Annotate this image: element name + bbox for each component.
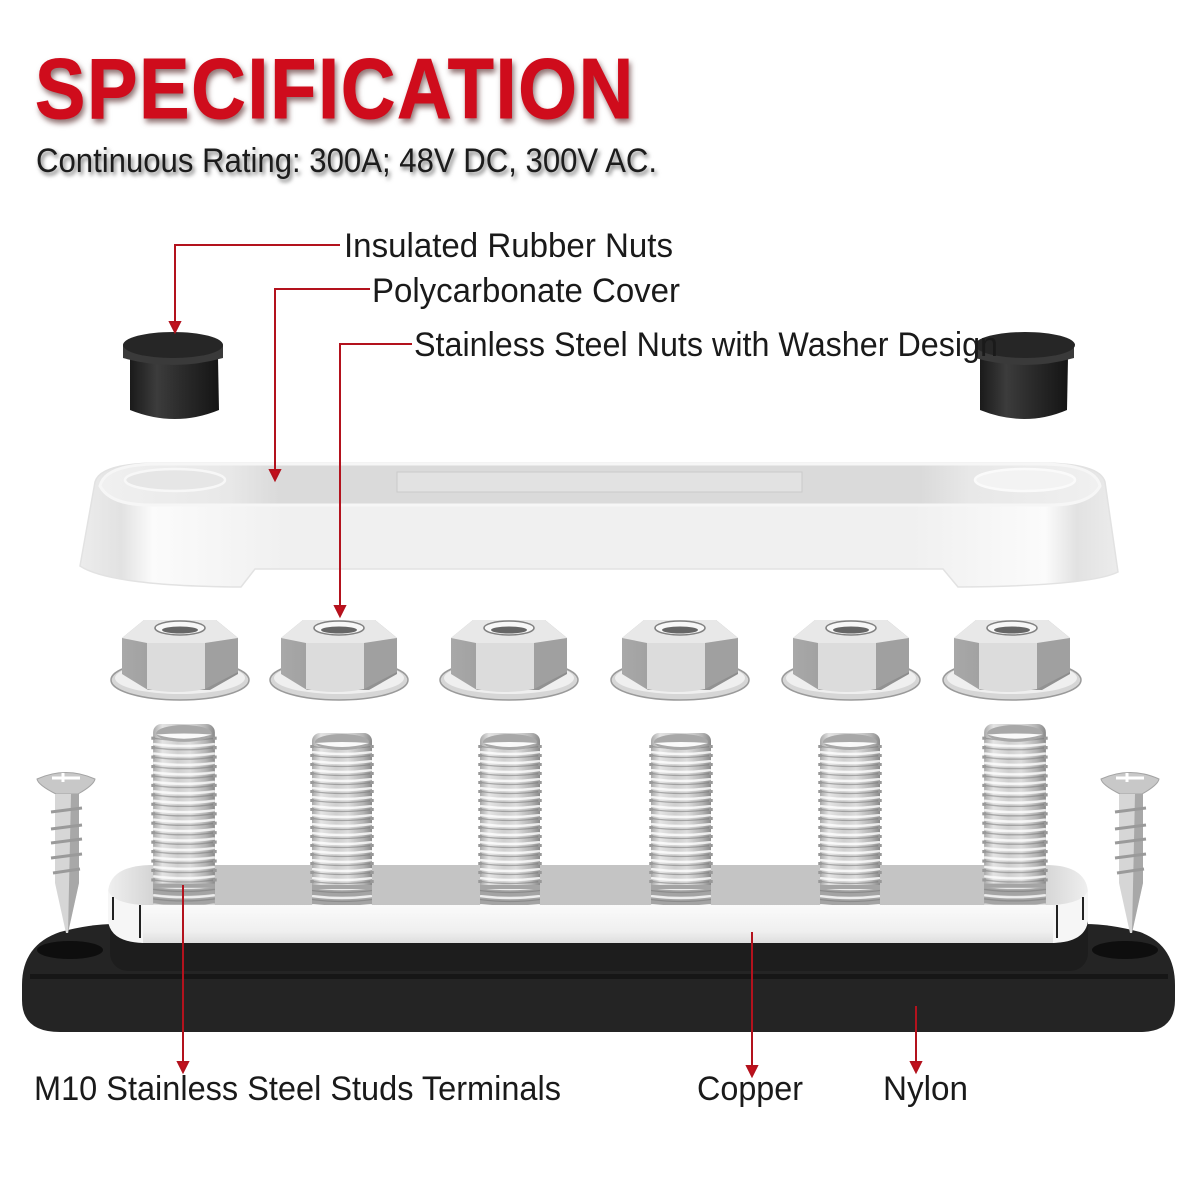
subtitle: continuous rating: Continuous Rating: 300A; 48V DC, 300V AC. <box>36 142 657 180</box>
icon: right insulated rubber nut <box>975 332 1075 419</box>
icon: left screw <box>37 772 95 933</box>
label: insulated rubber nuts: Insulated Rubber Nuts <box>344 227 673 265</box>
arrow: nylon <box>911 1006 921 1072</box>
icon: left insulated rubber nut <box>123 332 223 419</box>
polycarbonate cover <box>80 463 1118 587</box>
arrow: studs <box>178 885 188 1072</box>
arrow: copper <box>747 932 757 1076</box>
arrow: insulated rubber nuts <box>170 245 340 332</box>
arrow: stainless steel nuts <box>335 344 412 616</box>
arrow: polycarbonate cover <box>270 289 370 480</box>
studs <box>153 724 1046 905</box>
copper plate <box>108 865 1088 943</box>
nylon base <box>22 905 1175 1032</box>
label: nylon: Nylon <box>883 1070 968 1108</box>
title: SPECIFICATION <box>35 42 635 137</box>
label: studs: M10 Stainless Steel Studs Terminals <box>34 1070 561 1108</box>
icon: right screw <box>1101 772 1159 933</box>
stainless steel flange nuts <box>111 620 1081 700</box>
label: stainless steel nuts: Stainless Steel Nuts with Washer Design <box>414 326 998 364</box>
label: copper: Copper <box>697 1070 803 1108</box>
label: polycarbonate cover: Polycarbonate Cover <box>372 272 680 310</box>
